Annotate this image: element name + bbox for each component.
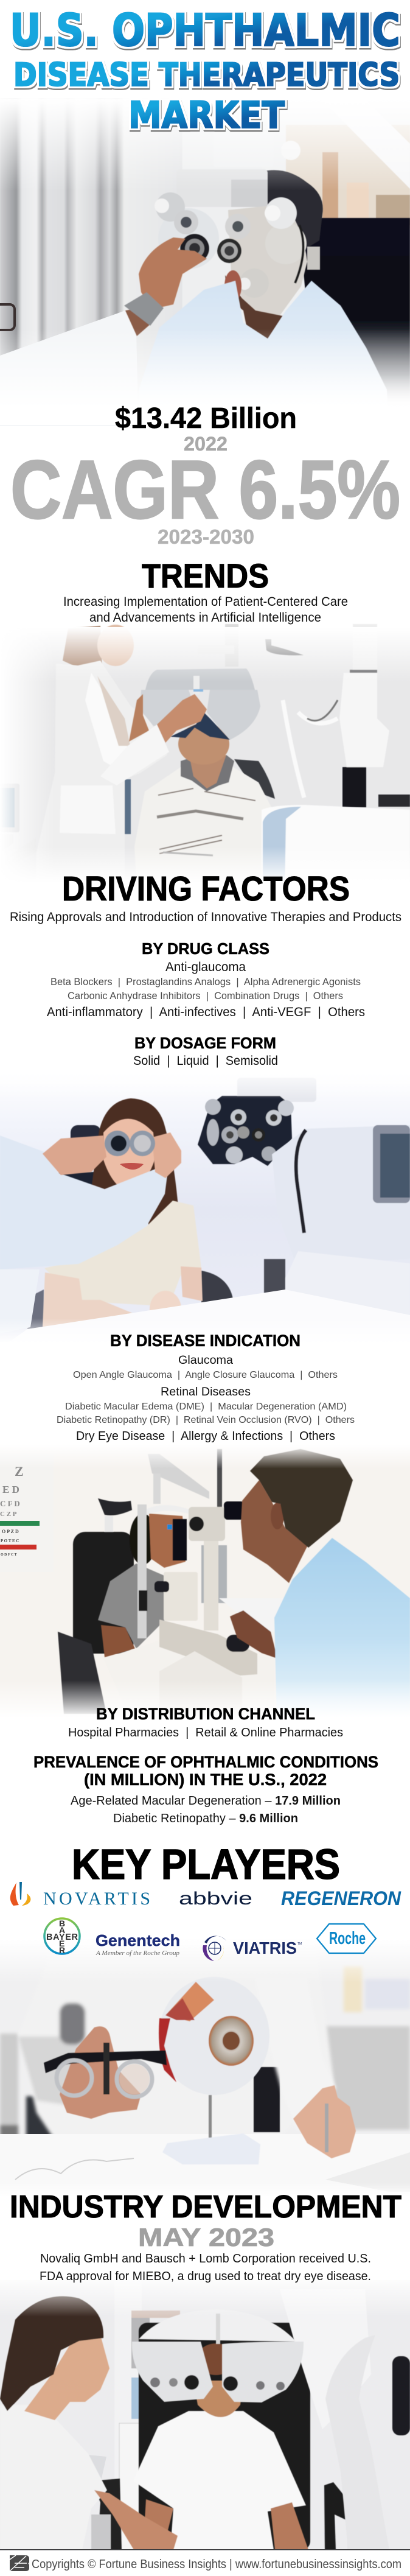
logo: Genentech: Genentech: [96, 1931, 180, 1950]
cabinet and shelves: [114, 2277, 180, 2550]
segment: by disease indication: Diabetic Macular Edema (DME) | Macular Degeneration (AMD): [65, 1402, 347, 1412]
laptop: [325, 2152, 410, 2192]
prevalence of ophthalmic conditions: Age-Related Macular Degeneration – 17.9 Million: [71, 1794, 341, 1808]
doctor hands: [100, 694, 207, 785]
eyeglasses on left edge: [0, 304, 15, 330]
eye chart: [0, 1454, 54, 1572]
eye chart: C Z P: [0, 1511, 17, 1518]
segment: by disease indication: BY DISEASE INDICATION: [110, 1332, 301, 1350]
slit lamp: [103, 1449, 274, 1720]
monitor: [76, 2454, 106, 2502]
photo: optometrist adjusting phoropter on patient: [0, 99, 410, 426]
segment: by distribution channel: BY DISTRIBUTION CHANNEL: [96, 1705, 315, 1723]
segment: by drug class: [47, 939, 365, 1019]
key players heading: KEY PLAYERS: [72, 1841, 340, 1888]
driving factors text: Rising Approvals and Introduction of Innovative Therapies and Products: [10, 910, 401, 924]
doctor arm and hand: [124, 237, 207, 336]
segment: by dosage form: BY DOSAGE FORM: [134, 1034, 276, 1052]
patient hair: [262, 170, 323, 250]
window and shelves: [286, 99, 410, 228]
chair: [27, 1125, 233, 1329]
eye model: [159, 1977, 269, 2164]
logo: Roche: Roche: [329, 1929, 366, 1948]
icon: Fortune Business Insights logo: [10, 2555, 29, 2571]
eye chart: Z: [15, 1464, 24, 1479]
prevalence of ophthalmic conditions: (IN MILLION) IN THE U.S., 2022: [84, 1771, 327, 1789]
segment: by drug class: Anti-inflammatory | Anti-infectives | Anti-VEGF | Others: [47, 1005, 365, 1019]
photo: woman trying trial frame glasses: [0, 1069, 410, 1434]
woman's face: [103, 1119, 156, 1192]
segment: by dosage form: Solid | Liquid | Semisolid: [133, 1054, 278, 1068]
glasses on table: [15, 2158, 134, 2180]
doctor's sleeve: [0, 1135, 167, 1269]
photo: child at phoropter with optometrist: [0, 2274, 410, 2550]
logo: Novartis: NOVARTIS: [43, 1889, 150, 1909]
segment: by drug class: BY DRUG CLASS: [142, 939, 269, 958]
eye chart: C F D: [0, 1499, 20, 1508]
doctor's coat: [18, 1942, 335, 2155]
driving factors heading: DRIVING FACTORS: [62, 869, 350, 908]
doctor: [219, 1449, 410, 1720]
eye chart: P O T E C: [1, 1539, 19, 1543]
patient face: [178, 723, 229, 765]
market size value: $13.42 Billion: [115, 402, 297, 435]
logo: Genentech: [96, 1931, 180, 1957]
table corner: [262, 805, 410, 895]
segment: by dosage form: [133, 1034, 278, 1068]
dark chair: [298, 218, 410, 402]
patient face: [225, 275, 286, 347]
t-shirt: [44, 1201, 201, 1305]
logo: Bayer: B: [59, 1918, 65, 1928]
segment: by drug class: Carbonic Anhydrase Inhibitors | Combination Drugs | Others: [68, 990, 343, 1002]
doctor's body below sleeve: [0, 1269, 40, 1333]
eye chart: O P Z D: [2, 1529, 19, 1534]
doctor coat: [36, 661, 167, 895]
segment: by disease indication: Dry Eye Disease | Allergy & Infections | Others: [76, 1430, 335, 1443]
logo: Genentech: A Member of the Roche Group: [96, 1950, 180, 1957]
CAGR period: 2023-2030: [158, 525, 254, 548]
trial frame: [105, 1131, 155, 1156]
blurred room background: [0, 1967, 410, 2149]
logo: Bayer: R: [59, 1945, 65, 1955]
monitor at left: [0, 784, 36, 871]
logo: Viatris: [203, 1936, 302, 1961]
photo: doctor with eye model and trial frame: [0, 1940, 410, 2197]
prevalence of ophthalmic conditions: [33, 1753, 378, 1825]
trends text: and Advancements in Artificial Intelligence: [89, 611, 321, 625]
title: MARKET: [128, 94, 285, 137]
doctor hair and face: [63, 625, 134, 670]
eye chart: E D: [2, 1484, 19, 1495]
coat sleeve right: [255, 1979, 336, 2131]
dark trousers gap: [254, 2067, 280, 2132]
segment: by disease indication: Retinal Diseases: [161, 1386, 251, 1399]
eye chart: O D F C T: [1, 1553, 17, 1557]
chair behind patient: [234, 759, 275, 799]
photo: slit lamp eye examination: [0, 1444, 410, 1875]
white band behind industry development text: [0, 2223, 410, 2281]
optometrist: [0, 2297, 178, 2550]
development text: FDA approval for MIEBO, a drug used to treat dry eye disease.: [40, 2270, 371, 2283]
chair: [91, 2323, 363, 2550]
logo: Novartis: [10, 1882, 150, 1909]
vision device: [140, 669, 260, 740]
segment: by distribution channel: Hospital Pharmacies | Retail & Online Pharmacies: [68, 1726, 343, 1739]
autorefractor machine: [264, 1125, 410, 1315]
doctor's hands: [43, 1132, 181, 1178]
patient: [98, 1505, 193, 1657]
segment: by distribution channel: [68, 1705, 343, 1739]
hand with pen: [293, 2085, 356, 2158]
phoropter: [132, 2309, 304, 2402]
industry development heading: INDUSTRY DEVELOPMENT: [10, 2189, 401, 2225]
prevalence of ophthalmic conditions: PREVALENCE OF OPHTHALMIC CONDITIONS: [33, 1753, 378, 1771]
logo: Bayer: [44, 1918, 80, 1955]
child: [133, 2343, 308, 2550]
development text: [40, 2252, 371, 2283]
patient shirt with stripes: [134, 755, 277, 895]
table: [0, 1290, 410, 1349]
doctor coat sleeve: [0, 311, 139, 426]
phoropter: [155, 131, 320, 320]
patient shirt: [139, 281, 389, 426]
market size year: 2022: [184, 433, 228, 455]
prevalence of ophthalmic conditions: Diabetic Retinopathy – 9.6 Million: [113, 1812, 298, 1825]
logo: Bayer: A: [59, 1925, 65, 1935]
trends text: Increasing Implementation of Patient-Centered Care: [63, 595, 348, 609]
development date: MAY 2023: [138, 2223, 274, 2251]
right machine: [280, 2289, 410, 2550]
logo: Bayer: E: [59, 1939, 64, 1948]
logo: Viatris: TM: [297, 1942, 302, 1946]
trial frame in hand: [44, 2026, 167, 2119]
trends text: [63, 595, 348, 625]
head rest and chair: [58, 1498, 134, 1714]
segment: by disease indication: Diabetic Retinopathy (DR) | Retinal Vein Occlusion (RVO) | Others: [57, 1415, 355, 1425]
title: [10, 5, 400, 137]
logo: Regeneron: REGENERON: [281, 1887, 401, 1909]
trends heading: TRENDS: [142, 556, 269, 595]
segment: by drug class: Anti-glaucoma: [165, 960, 246, 974]
photo: doctor with patient at vision device: [0, 624, 410, 942]
woman's smile: [120, 1163, 144, 1170]
segment: by disease indication: Open Angle Glaucoma | Angle Closure Glaucoma | Others: [73, 1370, 338, 1380]
logo: AbbVie: abbvie: [179, 1889, 252, 1909]
curtains: [0, 99, 182, 391]
phoropter on arm: [198, 1078, 316, 1166]
segment: by disease indication: [57, 1332, 355, 1443]
development text: Novaliq GmbH and Bausch + Lomb Corporation received U.S.: [40, 2252, 371, 2265]
equipment column and arm: [198, 624, 410, 807]
arms and hands: [43, 1266, 203, 1332]
woman's hair: [91, 1098, 189, 1277]
segment: by disease indication: Glaucoma: [178, 1354, 233, 1367]
table: [0, 2134, 410, 2195]
logo: Roche: [317, 1924, 376, 1953]
footer: [0, 2549, 410, 2576]
segment: by drug class: Beta Blockers | Prostaglandins Analogs | Alpha Adrenergic Agonists: [50, 976, 361, 988]
logo: Bayer: BAYER: [46, 1932, 78, 1942]
logo: Viatris: VIATRIS: [233, 1939, 297, 1957]
